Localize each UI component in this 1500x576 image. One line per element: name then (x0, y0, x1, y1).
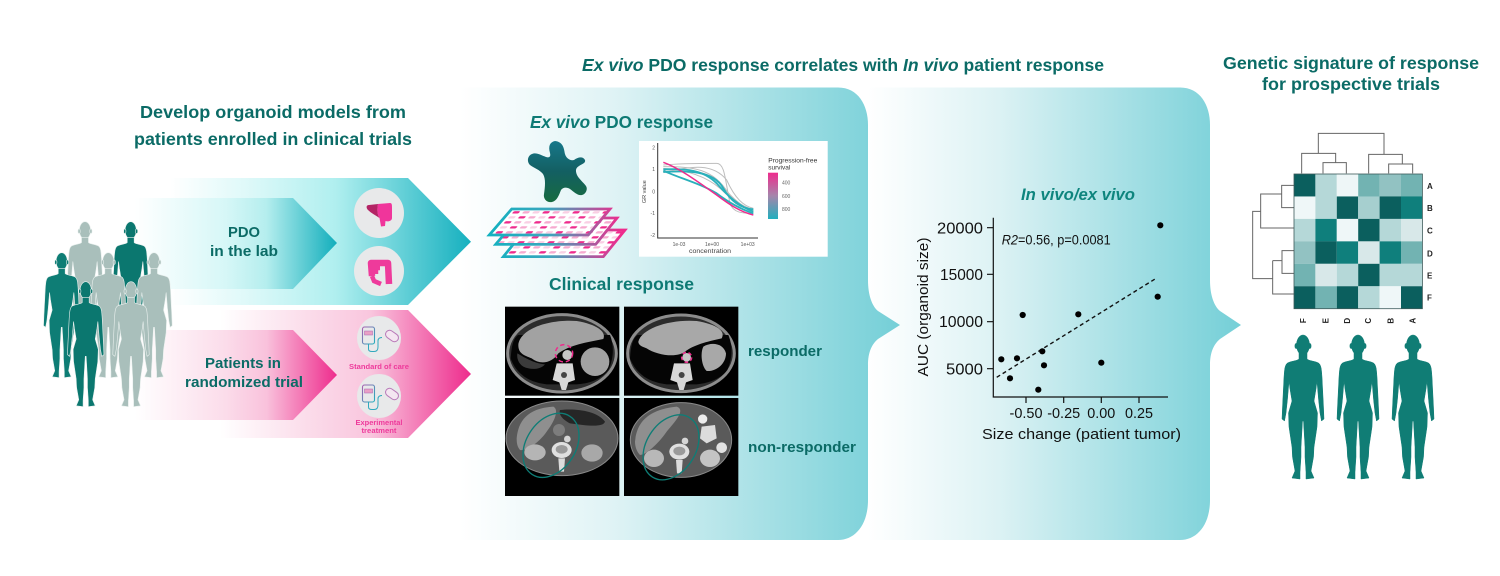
row labels: D (1427, 249, 1433, 258)
heading: in vivo / ex vivo: In vivo/ex vivo (1021, 186, 1135, 204)
column labels: A (1409, 318, 1418, 324)
y axis tick labels: 15000 (940, 267, 983, 284)
chart: gene signature heatmap (1253, 133, 1433, 324)
axes (987, 218, 1168, 403)
arrow: patients in randomized trial: Patients in (205, 355, 281, 372)
title: develop organoid models (134, 102, 412, 149)
heatmap cells (1294, 174, 1422, 309)
x axis tick labels: -0.25 (1047, 406, 1080, 422)
label: non-responder: non-responder (748, 440, 856, 456)
image: CT scans (505, 307, 738, 496)
y axis title: AUC (organoid size) (915, 238, 932, 376)
title: genetic signature: for prospective trials (1262, 74, 1440, 94)
title: develop organoid models: patients enrolled in clinical trials (134, 129, 412, 149)
arrow: large pink chevron (220, 310, 471, 438)
title: genetic signature: Genetic signature of response (1223, 53, 1479, 73)
chart: GR value dose response curves: Progression-free (768, 158, 818, 164)
chart: GR value dose response curves: -1 (651, 211, 655, 217)
heading: ex vivo PDO response: Ex vivo PDO response (530, 112, 713, 132)
row labels: B (1427, 204, 1433, 213)
heading: clinical response: Clinical response (549, 274, 694, 294)
chart: GR value dose response curves: GR value (642, 180, 648, 203)
label: responder: responder (748, 344, 822, 360)
y axis tick labels: 10000 (939, 314, 983, 331)
chart: GR value dose response curves: 1e-03 (673, 242, 686, 248)
regression line (997, 279, 1155, 377)
label: standard of care: Standard of care (349, 364, 409, 371)
arrow: PDO in the lab: PDO (228, 224, 260, 241)
arrow: large cyan chevron (170, 178, 471, 305)
label: experimental treatment (356, 420, 403, 435)
icon: three patients (1282, 335, 1434, 479)
CT scan: non-responder before (505, 398, 619, 496)
arrow: PDO in the lab (135, 198, 337, 289)
icon: colon (354, 246, 404, 296)
row labels (1427, 182, 1433, 302)
y axis tick labels: 5000 (946, 362, 983, 378)
column labels: F (1299, 318, 1308, 323)
icon: liver (354, 188, 404, 238)
arrow: patients in randomized trial (135, 330, 337, 420)
title: genetic signature (1223, 53, 1479, 94)
chart: GR value dose response curves: survival (768, 166, 790, 172)
chart: GR value dose response curves: 1 (652, 167, 655, 173)
CT scan: responder before (505, 307, 619, 396)
column labels: D (1343, 318, 1352, 324)
panel: in vivo / ex vivo correlation background (860, 88, 1241, 540)
icon: standard of care (357, 316, 401, 360)
row dendrogram (1253, 185, 1294, 294)
chart: GR value dose response curves: 600 (782, 194, 791, 200)
chart: GR value dose response curves (639, 141, 828, 257)
row labels: C (1427, 226, 1433, 235)
row labels: E (1427, 272, 1433, 281)
chart: AUC vs size change scatter plot (915, 218, 1181, 443)
chart: GR value dose response curves: 1e+03 (741, 242, 755, 248)
y axis tick labels: 20000 (937, 220, 983, 238)
chart: GR value dose response curves: 1e+00 (705, 242, 719, 248)
column labels (1299, 317, 1418, 324)
statistics annotation: R2=0.56, p=0.0081 (1002, 233, 1111, 248)
row labels: A (1427, 182, 1433, 191)
column labels: C (1364, 318, 1373, 324)
x axis tick labels (1010, 406, 1153, 422)
title: develop organoid models: Develop organoid models from (140, 102, 406, 122)
column dendrogram (1302, 133, 1413, 173)
label: experimental treatment: treatment (362, 428, 397, 435)
panel: ex vivo and clinical response background (460, 88, 900, 540)
x axis tick labels: -0.50 (1010, 406, 1042, 422)
chart: GR value dose response curves: 0 (652, 190, 655, 196)
x axis title: Size change (patient tumor) (982, 426, 1181, 443)
chart: GR value dose response curves: 2 (652, 146, 655, 152)
icon: experimental treatment (357, 374, 401, 418)
chart: GR value dose response curves: -2 (651, 233, 655, 239)
x axis tick labels: 0.00 (1087, 406, 1115, 422)
chart: GR value dose response curves: 800 (782, 207, 791, 213)
CT scan: responder after (624, 307, 738, 396)
column labels: E (1322, 317, 1331, 323)
y axis tick labels (937, 220, 983, 378)
icon: patient crowd (43, 222, 172, 407)
column labels: B (1387, 318, 1396, 324)
arrow: PDO in the lab: in the lab (210, 243, 278, 260)
arrow: patients in randomized trial: randomized trial (185, 374, 303, 391)
icon: organoid (528, 141, 587, 202)
label: experimental treatment: Experimental (356, 420, 403, 427)
data points (998, 222, 1163, 393)
chart: GR value dose response curves: 400 (782, 180, 791, 186)
CT scan: non-responder after (624, 398, 738, 496)
title: ex vivo correlates with in vivo: Ex vivo PDO response correlates with In vivo patient response (582, 55, 1104, 75)
icon: well plates (489, 209, 625, 257)
x axis tick labels: 0.25 (1125, 406, 1153, 422)
chart: GR value dose response curves: concentration (689, 248, 731, 255)
row labels: F (1427, 293, 1432, 302)
